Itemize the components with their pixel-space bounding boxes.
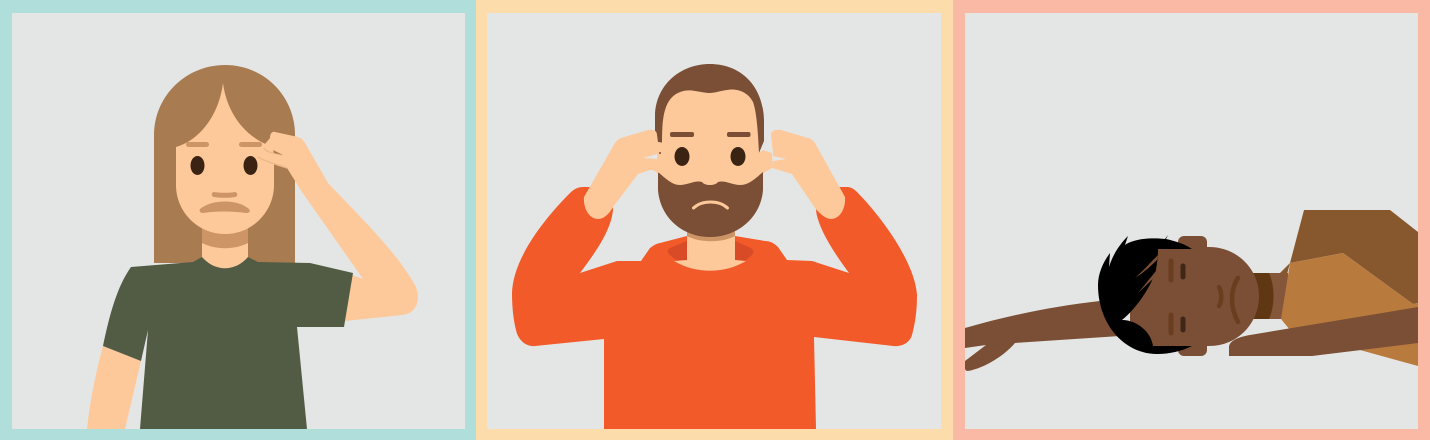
man: right hand and forearm	[771, 130, 845, 219]
lying person: dark shirt back	[1280, 210, 1418, 304]
lying person: shirt front	[1281, 253, 1418, 366]
woman: eyes	[190, 156, 258, 175]
woman: left arm	[87, 346, 141, 429]
frame: salmon panel border	[953, 0, 1430, 440]
man: eyebrows	[670, 132, 750, 137]
man: face	[656, 90, 772, 195]
man: beard	[658, 172, 763, 237]
woman: mouth	[200, 202, 250, 213]
frame: peach panel border	[476, 0, 953, 440]
lying person: black hair	[1098, 235, 1192, 354]
panel: man holding his ears	[512, 64, 917, 429]
lying person: closed eyes	[1180, 266, 1186, 330]
woman: raised arm and hand	[258, 132, 418, 321]
frame: teal panel border	[0, 0, 476, 440]
woman: eyebrows	[186, 142, 262, 147]
lying person: near arm	[1229, 307, 1418, 356]
woman: hair	[154, 65, 295, 263]
woman: neck	[202, 225, 248, 270]
panel: woman holding her temple	[87, 65, 418, 429]
lying person: face	[1130, 247, 1259, 346]
man: eyes	[674, 147, 746, 166]
man: neck	[674, 228, 746, 271]
man: left hand and forearm	[584, 130, 664, 219]
man: hair	[655, 64, 764, 153]
lying person: nose	[1219, 287, 1221, 306]
man: sweater collar	[668, 241, 753, 271]
panel: person lying on the floor	[965, 210, 1418, 371]
lying person: closed eyebrows	[1168, 261, 1174, 333]
lying person: neck	[1250, 273, 1288, 319]
woman: green t-shirt	[103, 257, 353, 429]
lying person: mouth	[1232, 278, 1238, 322]
lying person: far arm	[965, 301, 1120, 371]
woman: face	[176, 83, 274, 234]
lying person: ears	[1178, 236, 1207, 356]
lying person: hair highlights	[1135, 255, 1158, 293]
man: mouth	[694, 202, 728, 208]
woman: nose	[212, 192, 237, 198]
man: orange sweater	[512, 187, 917, 429]
